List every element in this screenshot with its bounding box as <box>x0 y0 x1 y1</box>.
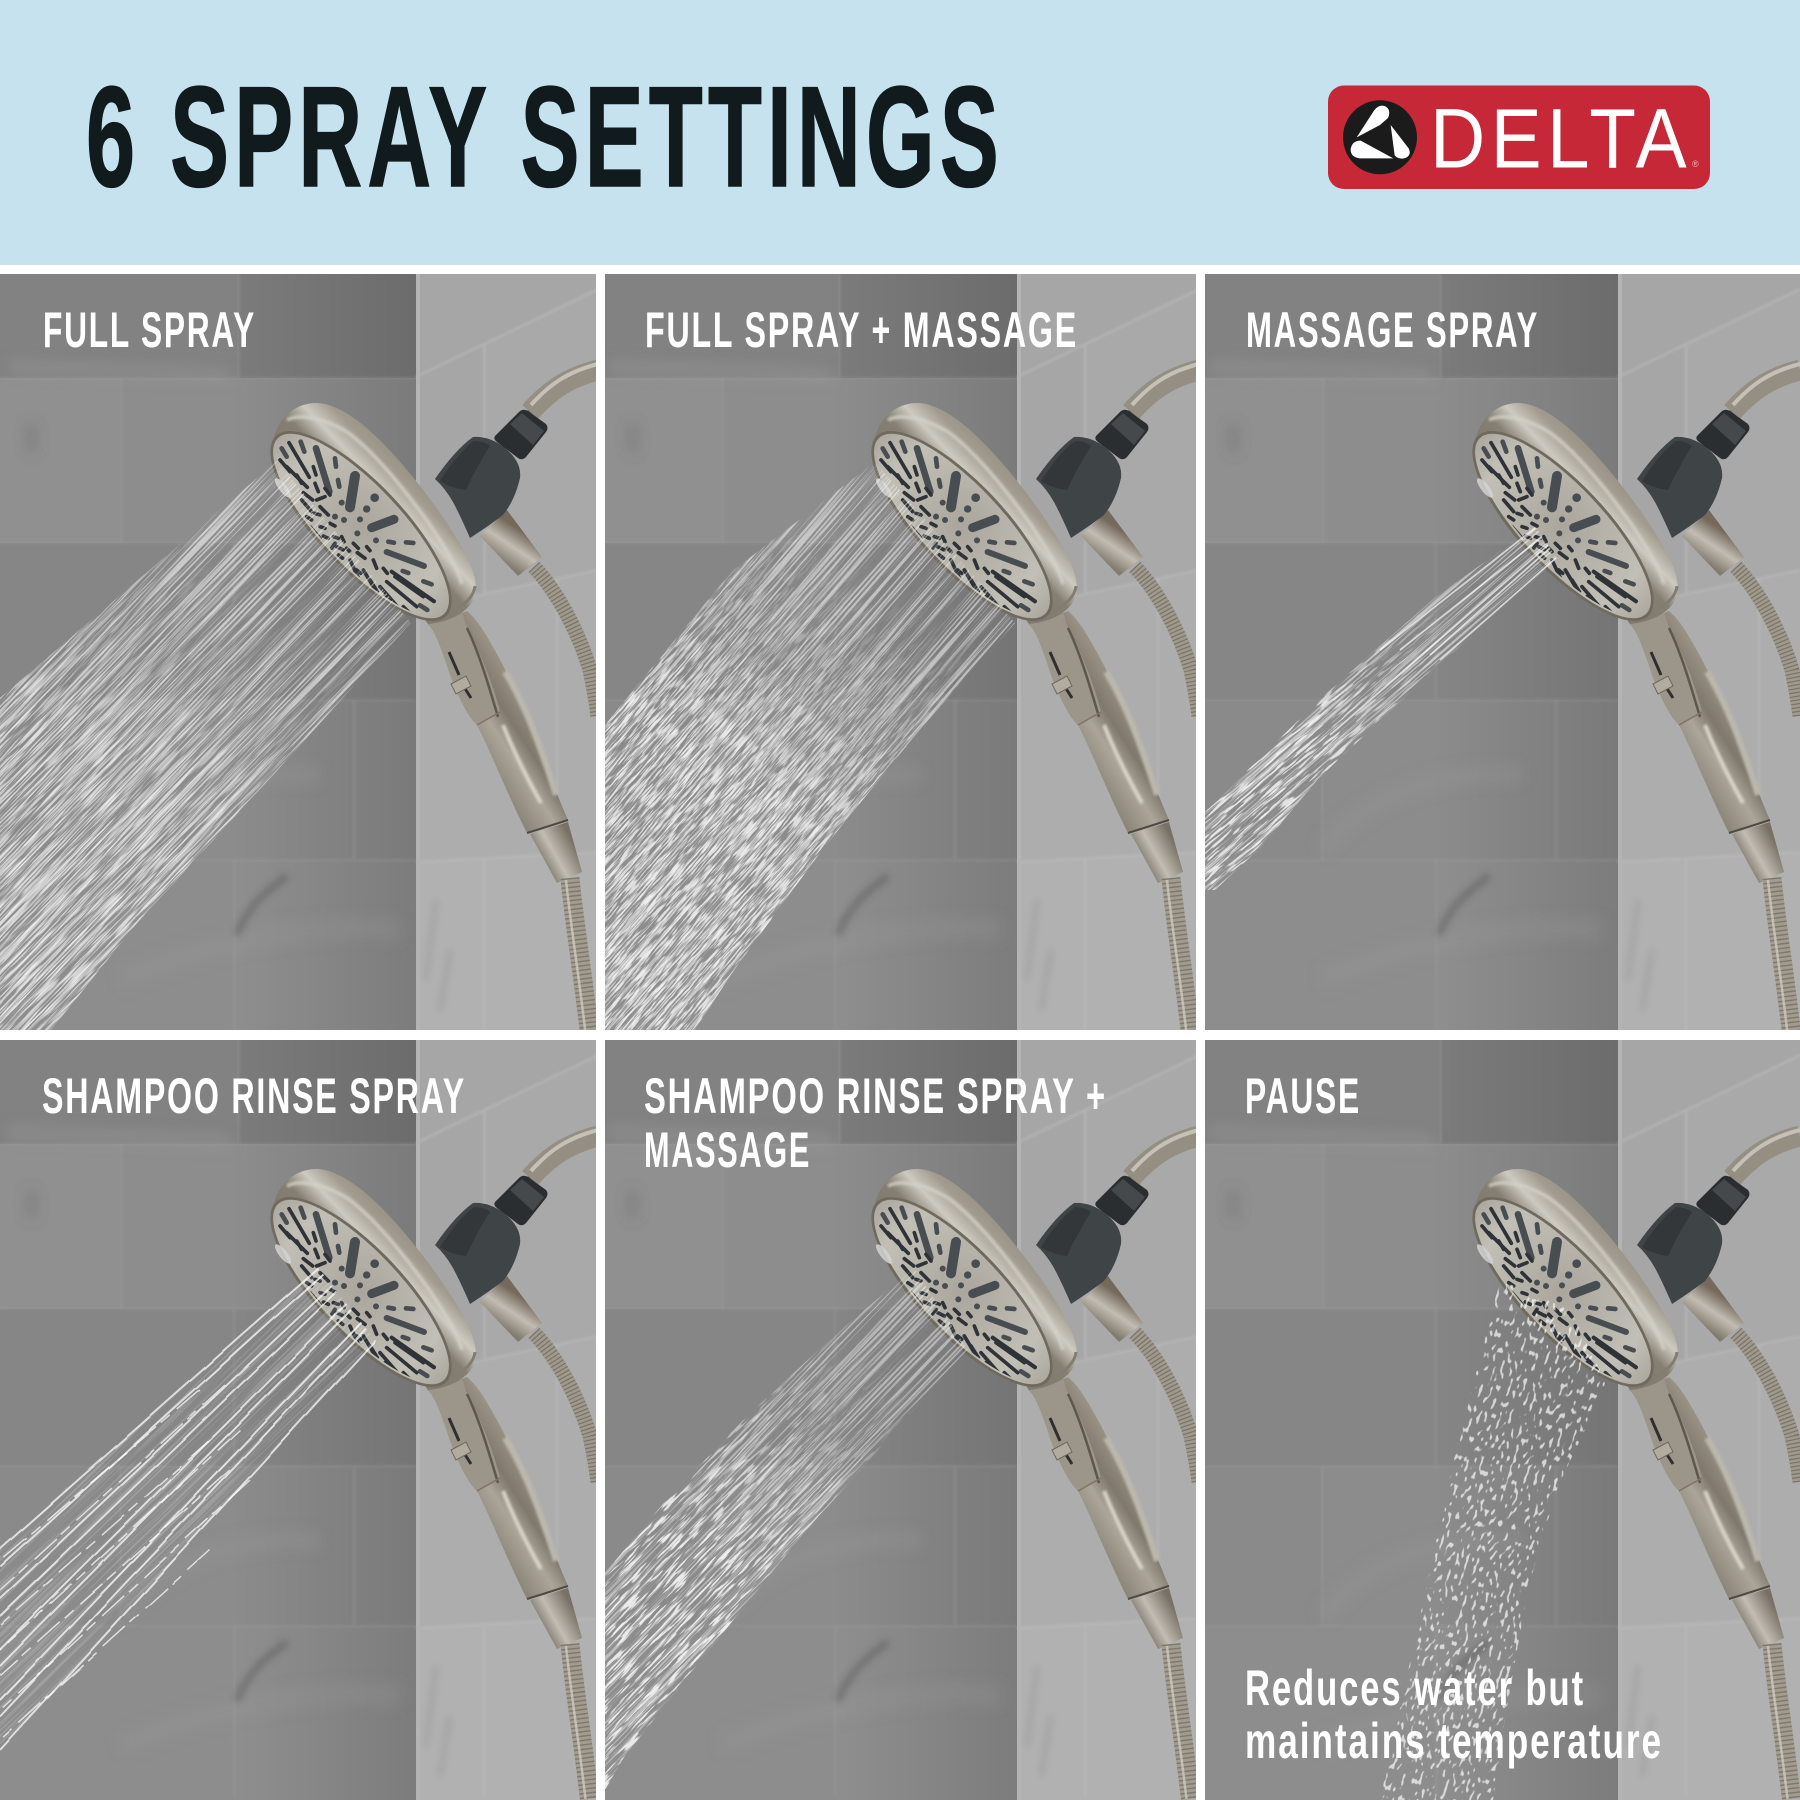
label: shampoo rinse spray: SHAMPOO RINSE SPRAY <box>42 1068 466 1124</box>
photo: wall and shower head <box>1202 274 1800 1034</box>
spray: massage <box>1205 526 1558 890</box>
spray: full + massage <box>605 462 1015 1030</box>
caption: pause benefit <box>1245 1660 1663 1769</box>
logo: Delta: DELTA <box>1430 92 1692 186</box>
photo: wall and shower head <box>601 1040 1199 1800</box>
caption: pause benefit: Reduces water but <box>1245 1660 1585 1716</box>
spray: pause droplets <box>1380 1280 1607 1800</box>
label: shampoo rinse spray + massage: MASSAGE <box>644 1122 811 1178</box>
spray: shampoo rinse + massage <box>605 1268 968 1790</box>
header band <box>0 0 1800 265</box>
panel: full spray <box>0 274 598 1034</box>
panel: massage spray <box>1202 274 1800 1034</box>
label: pause: PAUSE <box>1245 1068 1361 1124</box>
spray: full <box>0 461 411 1030</box>
panel: pause <box>1202 1040 1800 1800</box>
panel: shampoo rinse spray <box>0 1040 598 1800</box>
title: 6 SPRAY SETTINGS <box>86 58 1004 217</box>
label: shampoo rinse spray + massage <box>645 1078 1104 1168</box>
label: full spray + massage: FULL SPRAY + MASSAGE <box>645 302 1078 358</box>
label: shampoo rinse spray + massage: SHAMPOO RINSE SPRAY + <box>644 1068 1107 1124</box>
logo: Delta <box>1328 86 1710 189</box>
logo: Delta: ® <box>1692 159 1699 169</box>
photo: wall and shower head <box>601 274 1199 1034</box>
photo: wall and shower head <box>0 274 598 1034</box>
panel: full spray + massage <box>601 274 1199 1034</box>
label: full spray: FULL SPRAY <box>43 302 256 358</box>
spray: shampoo rinse <box>0 1268 375 1750</box>
panel: shampoo rinse spray + massage <box>601 1040 1199 1800</box>
label: massage spray: MASSAGE SPRAY <box>1246 302 1539 358</box>
photo: wall and shower head <box>1202 1040 1800 1800</box>
photo: wall and shower head <box>0 1040 598 1800</box>
